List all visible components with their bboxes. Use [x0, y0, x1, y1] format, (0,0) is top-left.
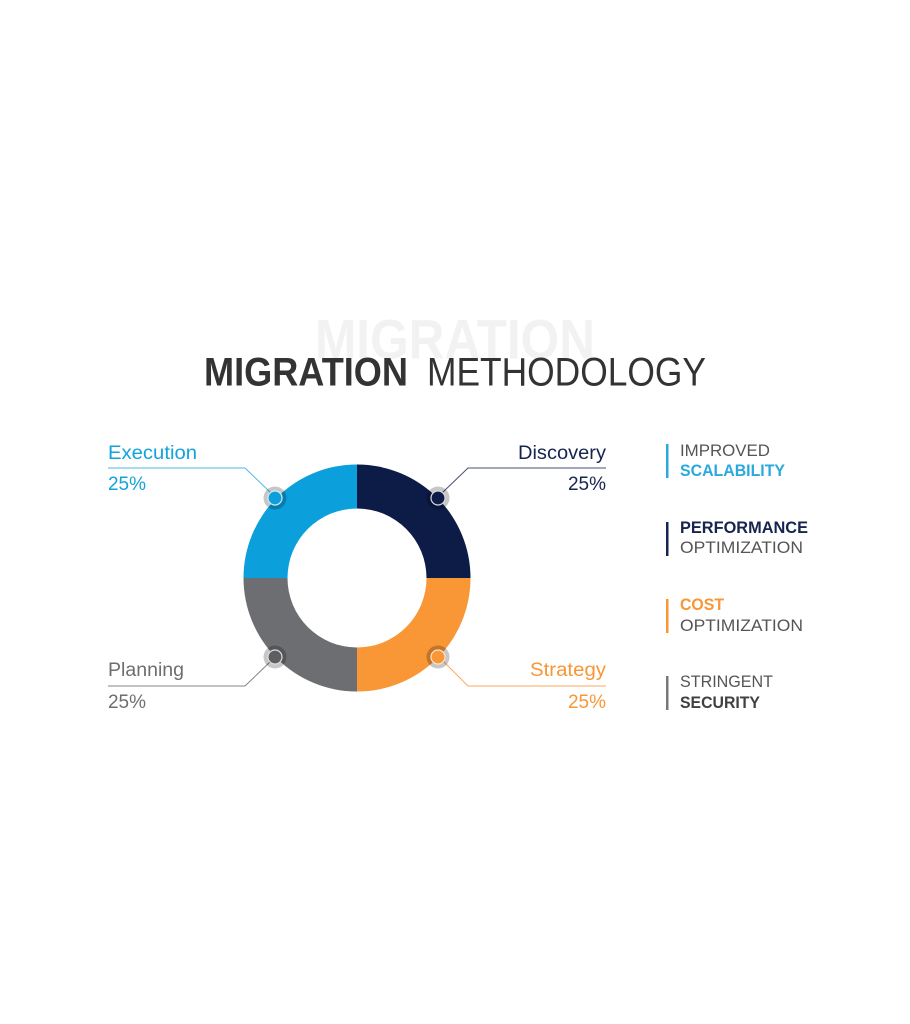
segment: discovery [357, 464, 470, 578]
marker [426, 486, 450, 510]
segment: execution [244, 464, 357, 578]
donut chart [244, 464, 470, 692]
callout: planning [108, 646, 286, 713]
text line one: COST [680, 595, 725, 614]
benefit: performance optimization [666, 518, 808, 557]
label: Planning [108, 660, 184, 681]
title [204, 308, 706, 394]
accent bar [666, 444, 668, 478]
value: 25% [568, 692, 606, 713]
accent bar [666, 522, 668, 556]
text line two: OPTIMIZATION [680, 616, 803, 635]
leader line [442, 468, 606, 493]
callout: discovery [426, 443, 607, 510]
leader line [108, 468, 271, 493]
title regular word: METHODOLOGY [427, 350, 706, 394]
text line one: PERFORMANCE [680, 518, 808, 537]
segment: planning [244, 578, 357, 692]
title bold word: MIGRATION [204, 350, 408, 394]
value: 25% [108, 474, 146, 495]
marker [264, 486, 286, 510]
accent bar [666, 676, 668, 710]
benefit: improved scalability [666, 441, 786, 480]
ghost title text: MIGRATION [315, 308, 595, 370]
benefit: cost optimization [666, 595, 803, 635]
text line two: SCALABILITY [680, 461, 786, 480]
benefit: stringent security [666, 672, 773, 712]
marker [426, 646, 450, 668]
callout: execution [108, 443, 286, 510]
callout: strategy [426, 646, 607, 713]
leader line [443, 661, 606, 686]
leader line [108, 661, 271, 686]
label: Discovery [518, 443, 607, 464]
text line one: STRINGENT [680, 672, 773, 691]
label: Strategy [530, 660, 607, 681]
text line one: IMPROVED [680, 441, 770, 460]
value: 25% [568, 474, 606, 495]
accent bar [666, 599, 668, 633]
text line two: SECURITY [680, 693, 761, 712]
marker [264, 646, 286, 668]
text line two: OPTIMIZATION [680, 538, 803, 557]
segment: strategy [357, 578, 470, 692]
label: Execution [108, 443, 197, 464]
value: 25% [108, 692, 146, 713]
